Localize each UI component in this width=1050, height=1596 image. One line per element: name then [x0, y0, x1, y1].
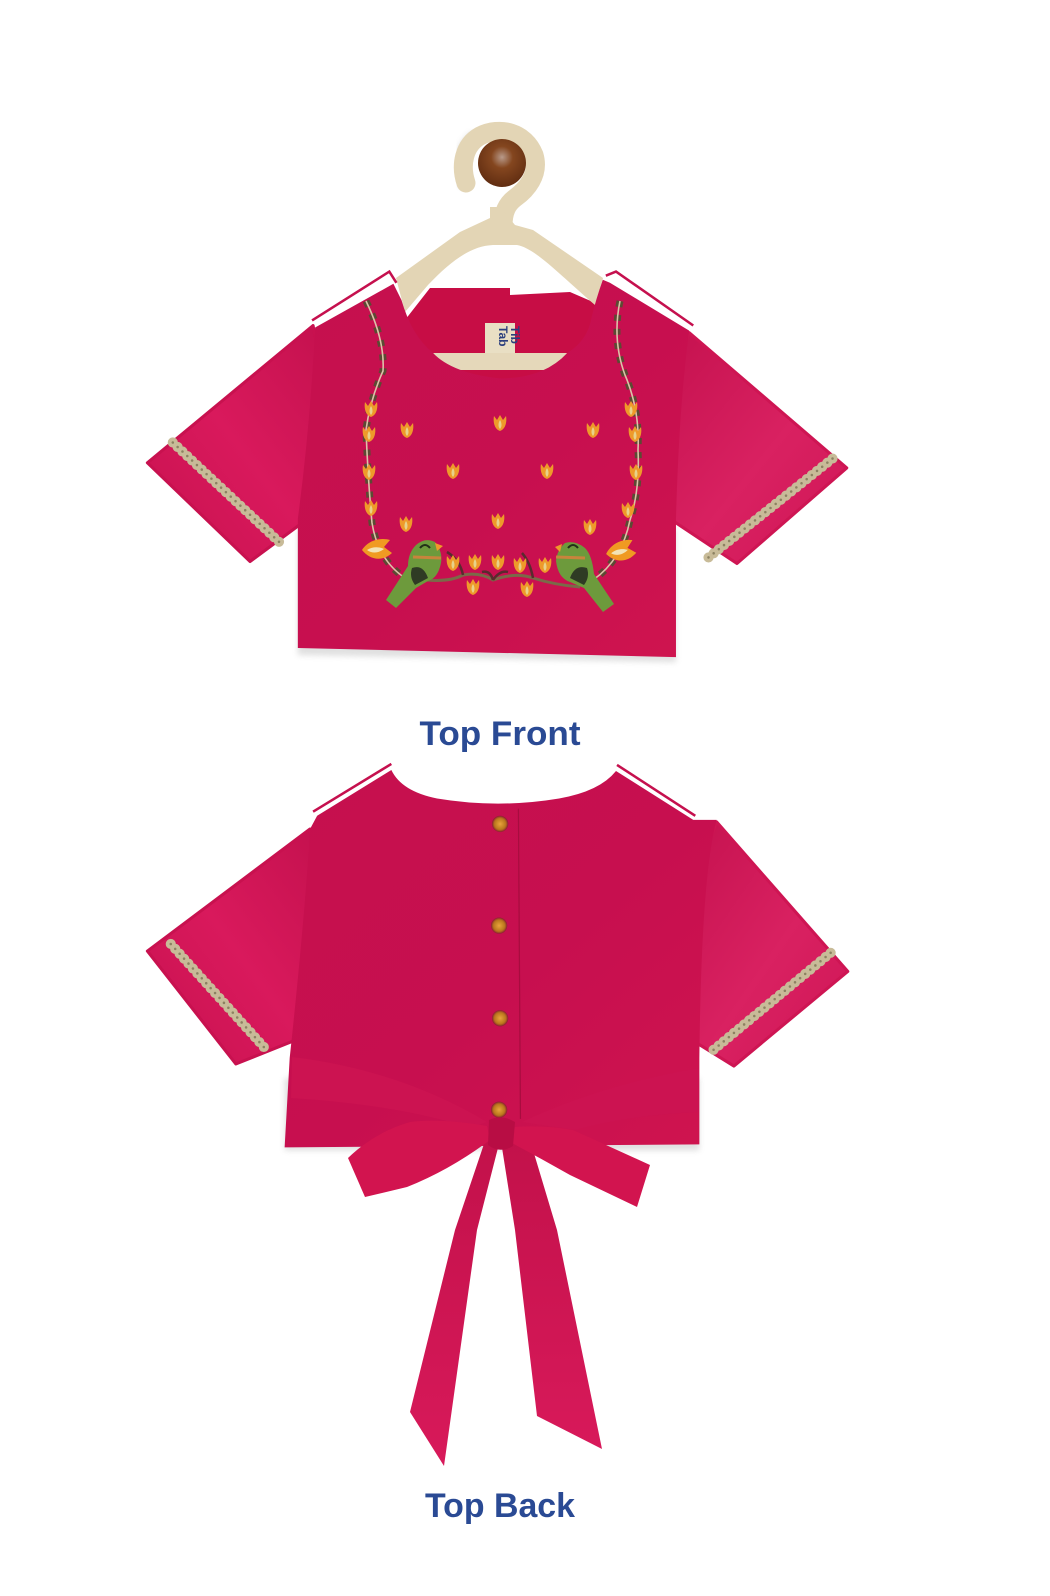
blouse back	[147, 764, 848, 1150]
shadow	[298, 529, 676, 662]
right parrot	[555, 542, 614, 612]
label text: Tib	[508, 326, 522, 344]
right strap	[617, 765, 695, 816]
left belt band	[291, 1057, 487, 1128]
buttons	[491, 816, 508, 1118]
blouse front back-fabric	[405, 288, 600, 385]
left vine	[366, 301, 405, 578]
front body	[298, 280, 689, 657]
heading: top back: Top Back	[425, 1487, 575, 1525]
bow and belt	[291, 1057, 699, 1466]
label text: Tab	[496, 326, 510, 346]
blouse front	[147, 272, 847, 662]
right sleeve	[681, 822, 848, 1066]
hook shadow	[458, 134, 474, 186]
heading: top front: Top Front	[420, 715, 580, 753]
shadow	[285, 1078, 699, 1150]
right sleeve	[661, 333, 847, 564]
bow knot	[488, 1117, 515, 1150]
right cuff braid	[709, 458, 834, 557]
left strap	[313, 764, 391, 812]
button placket seam	[518, 809, 520, 1119]
left tail	[410, 1135, 500, 1466]
hanger ball	[478, 139, 526, 187]
hook ring	[463, 131, 535, 226]
large right tulip	[605, 539, 637, 563]
left cuff braid	[173, 442, 282, 544]
right cuff braid	[714, 952, 831, 1050]
left bow loop	[348, 1121, 490, 1197]
hanger lower bar	[433, 353, 567, 370]
hanger	[396, 131, 603, 370]
left sleeve	[147, 326, 327, 561]
right strap	[606, 272, 693, 326]
tulips	[363, 401, 642, 597]
large left tulip	[362, 539, 392, 559]
hanger arms	[396, 207, 603, 312]
right belt band	[522, 1068, 699, 1130]
right vine	[593, 301, 638, 580]
branch swag	[427, 552, 580, 587]
left strap	[312, 272, 396, 320]
embroidery	[362, 301, 642, 612]
left parrot	[386, 540, 443, 608]
left sleeve	[147, 829, 320, 1064]
right bow loop	[510, 1126, 650, 1207]
left cuff braid	[171, 944, 266, 1050]
right tail	[500, 1135, 602, 1449]
back body	[285, 770, 717, 1147]
garment label	[485, 323, 522, 357]
